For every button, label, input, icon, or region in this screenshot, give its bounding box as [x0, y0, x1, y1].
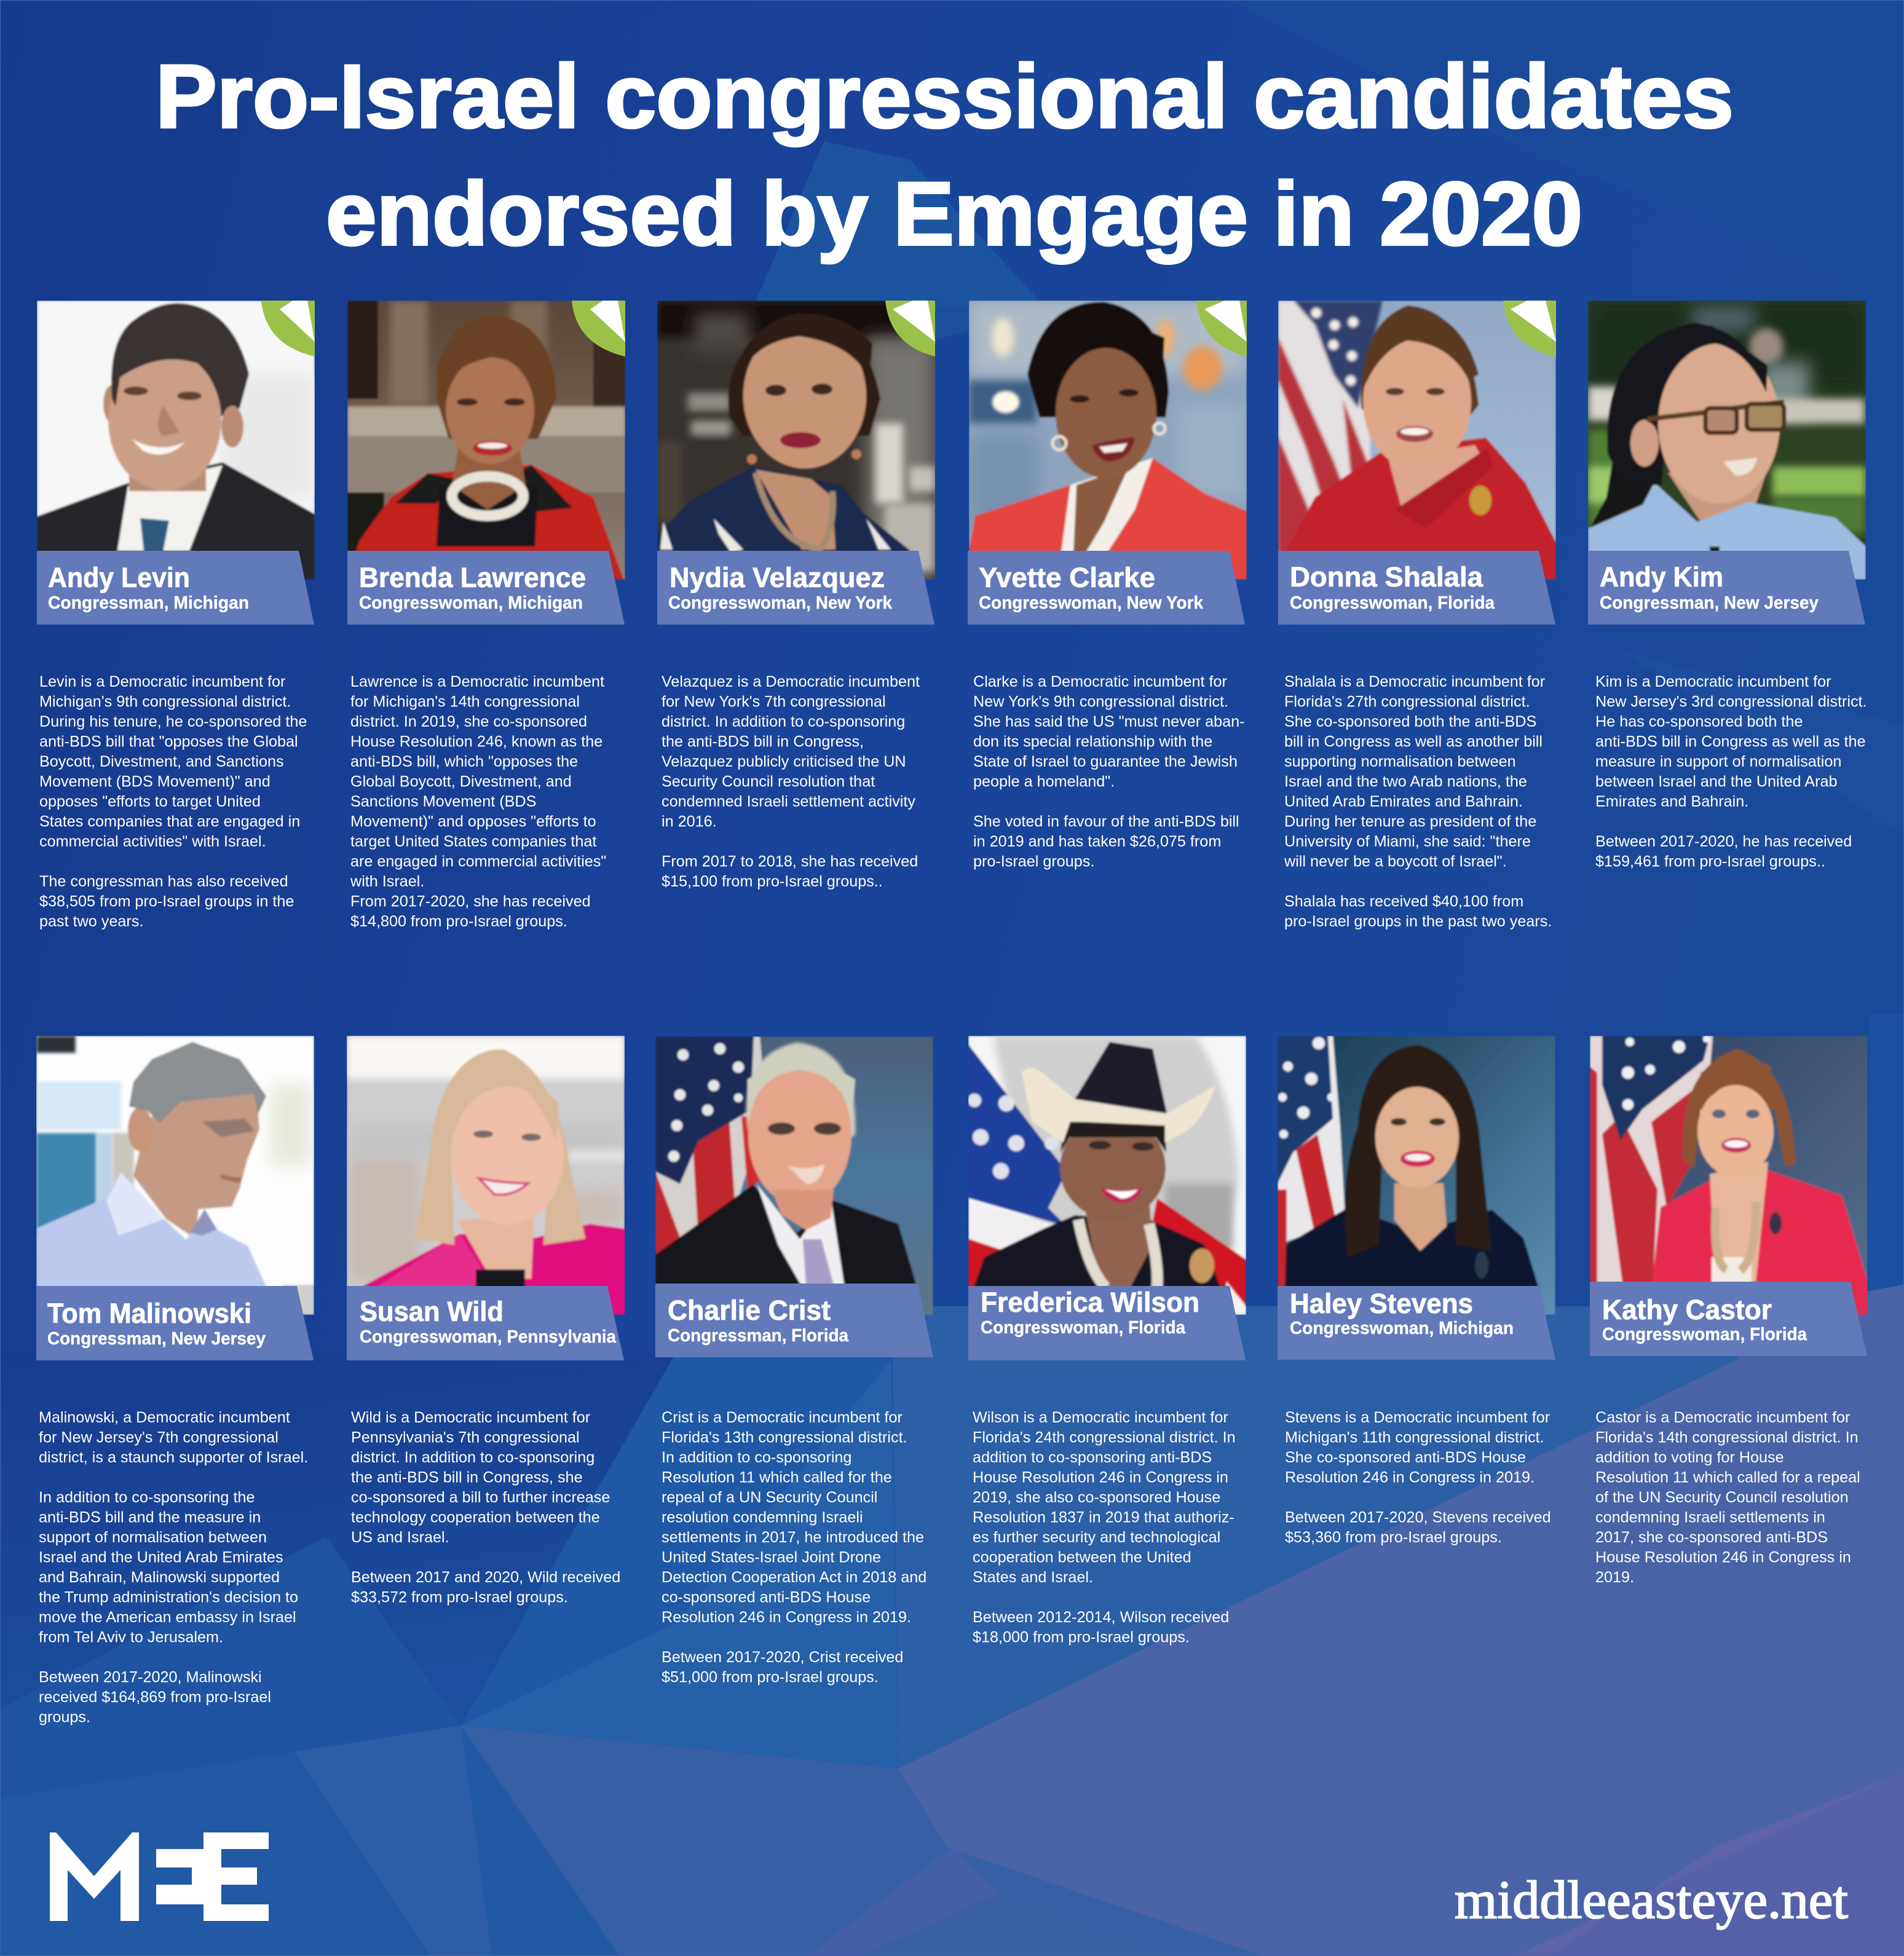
bio: Susan Wild: the anti-BDS bill in Congress, she [351, 1469, 583, 1486]
bio: Brenda Lawrence: Movement)" and opposes "efforts to [350, 813, 596, 830]
title: Pro-Israel congressional candidates [156, 46, 1734, 146]
bio: Charlie Crist: resolution condemning Israeli [662, 1508, 863, 1526]
bio: Frederica Wilson: 2019, she also co-sponsored House [973, 1489, 1220, 1506]
bio: Nydia Velazquez: Velazquez is a Democratic incumbent [662, 673, 920, 690]
bio: Brenda Lawrence: $14,800 from pro-Israel groups. [350, 913, 567, 930]
bio: Donna Shalala: University of Miami, she said: "there [1284, 833, 1531, 850]
bio: Nydia Velazquez: $15,100 from pro-Israel groups.. [662, 873, 883, 890]
bio: Susan Wild: Pennsylvania's 7th congressional [351, 1429, 580, 1446]
bio: Frederica Wilson: cooperation between the United [973, 1549, 1191, 1566]
bio: Yvette Clarke: Clarke is a Democratic incumbent for [973, 673, 1227, 690]
name label: Andy Kim: Congressman, New Jersey [1600, 593, 1819, 613]
bio: Brenda Lawrence: Lawrence is a Democratic incumbent [350, 673, 604, 690]
bio: Brenda Lawrence: district. In 2019, she co-sponsored [350, 713, 587, 730]
name label: Tom Malinowski [36, 1286, 314, 1360]
bio: Susan Wild: US and Israel. [351, 1529, 449, 1546]
bio: Charlie Crist: Resolution 246 in Congress in 2019. [662, 1609, 911, 1626]
panel: Donna Shalala [1278, 301, 1556, 930]
bio: Andy Levin: commercial activities" with Israel. [39, 833, 266, 850]
name label: Susan Wild [347, 1286, 624, 1360]
bio: Charlie Crist: repeal of a UN Security Council [662, 1489, 877, 1506]
bio: Charlie Crist: co-sponsored anti-BDS House [662, 1588, 871, 1606]
bio: Donna Shalala: She co-sponsored both the anti-BDS [1284, 713, 1536, 730]
name label: Susan Wild: Congresswoman, Pennsylvania [360, 1327, 617, 1347]
icon: green badge [1503, 301, 1556, 357]
bio: Brenda Lawrence: House Resolution 246, known as the [350, 733, 602, 750]
bio: Nydia Velazquez: for New York's 7th congressional [662, 693, 886, 711]
bio: Tom Malinowski: In addition to co-sponsoring the [39, 1489, 255, 1506]
photo: Andy Kim [1588, 301, 1866, 580]
panel: Brenda Lawrence [347, 301, 625, 930]
name label: Charlie Crist: Charlie Crist [668, 1295, 831, 1326]
bio: Nydia Velazquez: condemned Israeli settlement activity [662, 793, 915, 810]
bio: Nydia Velazquez: district. In addition to co-sponsoring [662, 713, 905, 730]
bio: Andy Kim: measure in support of normalisation [1595, 753, 1841, 770]
bio: Donna Shalala: will never be a boycott of Israel". [1284, 853, 1507, 870]
bio: Susan Wild: co-sponsored a bill to further increase [351, 1489, 610, 1506]
bio: Tom Malinowski: groups. [39, 1709, 90, 1726]
bio: Frederica Wilson: Resolution 1837 in 2019 that authoriz- [973, 1508, 1234, 1526]
icon: green badge [572, 301, 625, 357]
bio: Tom Malinowski: anti-BDS bill and the measure in [39, 1508, 261, 1526]
bio: Kathy Castor: condemning Israeli settlements in [1595, 1508, 1825, 1526]
bio: Susan Wild: technology cooperation between the [351, 1508, 600, 1526]
panel: Andy Levin [37, 301, 315, 930]
bio: Tom Malinowski: support of normalisation between [39, 1529, 267, 1546]
bio: Andy Levin: During his tenure, he co-sponsored the [39, 713, 307, 730]
bio: Tom Malinowski: received $164,869 from pro-Israel [39, 1689, 271, 1706]
name label: Frederica Wilson: Congresswoman, Florida [981, 1318, 1186, 1338]
name label: Andy Levin: Congressman, Michigan [48, 593, 249, 613]
bio: Charlie Crist: In addition to co-sponsoring [662, 1449, 851, 1466]
bio: Andy Kim: New Jersey's 3rd congressional district. [1595, 693, 1867, 711]
photo: Frederica Wilson [968, 1036, 1246, 1315]
icon: green badge [261, 301, 315, 357]
title: endorsed by Emgage in 2020 [326, 164, 1582, 264]
bio: Charlie Crist: United States-Israel Joint Drone [662, 1549, 881, 1566]
bio: Yvette Clarke: She voted in favour of the anti-BDS bill [973, 813, 1239, 830]
panel: Tom Malinowski [36, 1036, 314, 1726]
bio: Brenda Lawrence: with Israel. [350, 873, 424, 890]
bio: Andy Kim: Kim is a Democratic incumbent for [1595, 673, 1831, 690]
photo: Kathy Castor [1590, 1035, 1868, 1315]
bio: Kathy Castor: Castor is a Democratic incumbent for [1595, 1409, 1850, 1426]
panel: Frederica Wilson [968, 1036, 1246, 1646]
bio: Kathy Castor: House Resolution 246 in Congress in [1595, 1549, 1851, 1566]
bio: Andy Kim: anti-BDS bill in Congress as well as the [1595, 733, 1866, 750]
bio: Andy Kim: $159,461 from pro-Israel groups.. [1595, 853, 1825, 870]
bio: Yvette Clarke: She has said the US "must never aban- [973, 713, 1245, 730]
name label: Frederica Wilson [968, 1286, 1246, 1360]
photo: Brenda Lawrence [347, 301, 625, 580]
name label: Donna Shalala [1278, 551, 1555, 625]
name label: Donna Shalala: Donna Shalala [1290, 561, 1483, 593]
bio: Charlie Crist: Resolution 11 which called for the [662, 1469, 892, 1486]
bio: Donna Shalala: Israel and the two Arab nations, the [1284, 773, 1527, 791]
photo: Donna Shalala [1278, 301, 1556, 580]
bio: Brenda Lawrence: anti-BDS bill, which "opposes the [350, 753, 578, 770]
bio: Donna Shalala: bill in Congress as well as another bill [1284, 733, 1543, 750]
name label: Haley Stevens: Congresswoman, Michigan [1290, 1319, 1514, 1338]
name label: Nydia Velazquez: Nydia Velazquez [670, 562, 885, 593]
bio: Andy Kim: between Israel and the United Arab [1595, 773, 1837, 791]
bio: Brenda Lawrence: are engaged in commercial activities" [350, 853, 606, 870]
bio: Nydia Velazquez: From 2017 to 2018, she has received [662, 853, 918, 870]
photo: Andy Levin [37, 301, 315, 580]
name label: Kathy Castor: Kathy Castor [1602, 1294, 1772, 1325]
bio: Tom Malinowski: Israel and the United Arab Emirates [39, 1549, 283, 1566]
bio: Tom Malinowski: and Bahrain, Malinowski supported [39, 1569, 280, 1586]
name label: Brenda Lawrence: Congresswoman, Michigan [359, 593, 583, 613]
bio: Charlie Crist: Detection Cooperation Act in 2018 and [662, 1569, 926, 1586]
bio: Nydia Velazquez: Velazquez publicly criticised the UN [662, 753, 906, 770]
bio: Charlie Crist: settlements in 2017, he introduced the [662, 1529, 924, 1546]
name label: Yvette Clarke [968, 551, 1245, 625]
bio: Tom Malinowski: Between 2017-2020, Malinowski [39, 1668, 262, 1686]
bio: Frederica Wilson: States and Israel. [973, 1569, 1093, 1586]
bio: Donna Shalala: Florida's 27th congressional district. [1284, 693, 1530, 711]
bio: Andy Kim: He has co-sponsored both the [1595, 713, 1803, 730]
bio: Tom Malinowski: district, is a staunch supporter of Israel. [39, 1449, 308, 1466]
bio: Andy Levin: Boycott, Divestment, and Sanctions [39, 753, 284, 770]
bio: Kathy Castor: Florida's 14th congressional district. In [1595, 1429, 1859, 1446]
bio: Tom Malinowski: for New Jersey's 7th congressional [39, 1429, 278, 1446]
name label: Andy Levin: Andy Levin [48, 562, 190, 593]
bio: Yvette Clarke: State of Israel to guarantee the Jewish [973, 753, 1238, 770]
bio: Yvette Clarke: pro-Israel groups. [973, 853, 1094, 870]
bio: Brenda Lawrence: From 2017-2020, she has received [350, 893, 591, 910]
name label: Donna Shalala: Congresswoman, Florida [1290, 593, 1495, 613]
bio: Brenda Lawrence: for Michigan's 14th congressional [350, 693, 580, 711]
bio: Charlie Crist: Florida's 13th congressional district. [662, 1429, 907, 1446]
bio: Charlie Crist: $51,000 from pro-Israel groups. [662, 1668, 879, 1686]
bio: Andy Levin: $38,505 from pro-Israel groups in the [39, 893, 294, 910]
bio: Haley Stevens: Michigan's 11th congressional district. [1285, 1429, 1544, 1446]
bio: Susan Wild: Wild is a Democratic incumbent for [351, 1409, 590, 1426]
photo: Nydia Velazquez [657, 301, 935, 580]
bio: Frederica Wilson: addition to co-sponsoring anti-BDS [973, 1449, 1212, 1466]
photo: Yvette Clarke [969, 301, 1247, 580]
bio: Andy Kim: Between 2017-2020, he has received [1595, 833, 1852, 850]
name label: Susan Wild: Susan Wild [360, 1296, 504, 1327]
bio: Nydia Velazquez: the anti-BDS bill in Congress, [662, 733, 864, 750]
name label: Charlie Crist: Congressman, Florida [668, 1326, 849, 1346]
name label: Frederica Wilson: Frederica Wilson [981, 1287, 1199, 1318]
panel: Nydia Velazquez [657, 301, 935, 890]
bio: Haley Stevens: She co-sponsored anti-BDS House [1285, 1449, 1526, 1466]
bio: Brenda Lawrence: Sanctions Movement (BDS [350, 793, 536, 810]
name label: Yvette Clarke: Congresswoman, New York [979, 593, 1204, 613]
bio: Brenda Lawrence: target United States companies that [350, 833, 596, 850]
bio: Tom Malinowski: move the American embassy in Israel [39, 1609, 296, 1626]
bio: Kathy Castor: Resolution 11 which called for a repeal [1595, 1469, 1860, 1486]
name label: Charlie Crist [655, 1284, 933, 1357]
bio: Susan Wild: Between 2017 and 2020, Wild received [351, 1569, 620, 1586]
panel: Andy Kim [1588, 301, 1867, 870]
bio: Tom Malinowski: Malinowski, a Democratic incumbent [39, 1409, 290, 1426]
name label: Brenda Lawrence: Brenda Lawrence [359, 562, 586, 593]
title [156, 46, 1734, 264]
bio: Kathy Castor: 2017, she co-sponsored anti-BDS [1595, 1529, 1828, 1546]
icon: green badge [885, 301, 935, 357]
bio: Donna Shalala: Shalala is a Democratic incumbent for [1284, 673, 1545, 690]
bio: Andy Levin: Movement (BDS Movement)" and [39, 773, 271, 791]
bio: Frederica Wilson: Between 2012-2014, Wilson received [973, 1609, 1229, 1626]
name label: Brenda Lawrence [347, 551, 625, 625]
bio: Tom Malinowski: from Tel Aviv to Jerusalem. [39, 1629, 223, 1646]
name label: Haley Stevens: Haley Stevens [1290, 1288, 1473, 1319]
bio: Nydia Velazquez: in 2016. [662, 813, 717, 830]
bio: Andy Levin: Levin is a Democratic incumbent for [39, 673, 285, 690]
bio: Andy Levin: The congressman has also received [39, 873, 288, 890]
photo: Charlie Crist [655, 1036, 933, 1315]
bio: Frederica Wilson: Wilson is a Democratic incumbent for [973, 1409, 1228, 1426]
bio: Kathy Castor: of the UN Security Council resolution [1595, 1489, 1849, 1506]
bio: Susan Wild: $33,572 from pro-Israel groups. [351, 1588, 568, 1606]
name label: Tom Malinowski: Congressman, New Jersey [47, 1329, 266, 1349]
bio: Yvette Clarke: New York's 9th congressional district. [973, 693, 1228, 711]
bio: Charlie Crist: Between 2017-2020, Crist received [662, 1649, 903, 1666]
bio: Kathy Castor: addition to voting for House [1595, 1449, 1784, 1466]
photo: Haley Stevens [1278, 1036, 1555, 1315]
bio: Frederica Wilson: $18,000 from pro-Israel groups. [973, 1629, 1190, 1646]
bio: Donna Shalala: pro-Israel groups in the past two years. [1284, 913, 1552, 930]
bio: Haley Stevens: Between 2017-2020, Stevens received [1285, 1508, 1551, 1526]
bio: Haley Stevens: Resolution 246 in Congress in 2019. [1285, 1469, 1535, 1486]
bio: Kathy Castor: 2019. [1595, 1569, 1634, 1586]
name label: Andy Kim: Andy Kim [1600, 561, 1723, 593]
panel: Haley Stevens [1278, 1036, 1555, 1546]
bio: Haley Stevens: $53,360 from pro-Israel groups. [1285, 1529, 1502, 1546]
bio: Andy Levin: opposes "efforts to target United [39, 793, 261, 810]
bio: Yvette Clarke: in 2019 and has taken $26,075 from [973, 833, 1221, 850]
name label: Yvette Clarke: Yvette Clarke [979, 562, 1155, 593]
bio: Andy Levin: States companies that are engaged in [39, 813, 300, 830]
bio: Yvette Clarke: don its special relationship with the [973, 733, 1212, 750]
name label: Andy Levin [37, 551, 314, 625]
name label: Kathy Castor [1590, 1282, 1867, 1356]
bio: Frederica Wilson: es further security and technological [973, 1529, 1220, 1546]
photo: Tom Malinowski [36, 1036, 314, 1315]
panel: Charlie Crist [655, 1036, 933, 1686]
icon: green badge [1196, 301, 1247, 357]
name label: Tom Malinowski: Tom Malinowski [47, 1298, 251, 1329]
panel: Susan Wild [347, 1036, 641, 1606]
photo: Susan Wild [347, 1036, 641, 1315]
bio: Brenda Lawrence: Global Boycott, Divestment, and [350, 773, 572, 791]
bio: Frederica Wilson: House Resolution 246 in Congress in [973, 1469, 1228, 1486]
bio: Donna Shalala: supporting normalisation between [1284, 753, 1516, 770]
bio: Andy Levin: past two years. [39, 913, 143, 930]
name label: Kathy Castor: Congresswoman, Florida [1602, 1325, 1807, 1344]
name label: Andy Kim [1588, 551, 1865, 625]
bio: Charlie Crist: Crist is a Democratic incumbent for [662, 1409, 903, 1426]
bio: Tom Malinowski: the Trump administration's decision to [39, 1588, 298, 1606]
panel: Yvette Clarke [968, 301, 1247, 870]
bio: Donna Shalala: During her tenure as president of the [1284, 813, 1536, 830]
bio: Andy Levin: Michigan's 9th congressional district. [39, 693, 291, 711]
name label: Nydia Velazquez [657, 551, 934, 625]
bio: Andy Levin: anti-BDS bill that "opposes the Global [39, 733, 298, 750]
name label: Nydia Velazquez: Congresswoman, New York [668, 593, 893, 613]
bio: Susan Wild: district. In addition to co-sponsoring [351, 1449, 595, 1466]
bio: Yvette Clarke: people a homeland". [973, 773, 1115, 791]
bio: Andy Kim: Emirates and Bahrain. [1595, 793, 1748, 810]
name label: Haley Stevens [1278, 1286, 1555, 1360]
bio: Donna Shalala: United Arab Emirates and Bahrain. [1284, 793, 1523, 810]
bio: Nydia Velazquez: Security Council resolution that [662, 773, 875, 791]
bio: Haley Stevens: Stevens is a Democratic incumbent for [1285, 1409, 1550, 1426]
panel: Kathy Castor [1590, 1035, 1868, 1586]
website url: middleeasteye.net [1455, 1871, 1848, 1930]
bio: Donna Shalala: Shalala has received $40,100 from [1284, 893, 1523, 910]
logo: MEE [50, 1832, 269, 1921]
bio: Frederica Wilson: Florida's 24th congressional district. In [973, 1429, 1236, 1446]
